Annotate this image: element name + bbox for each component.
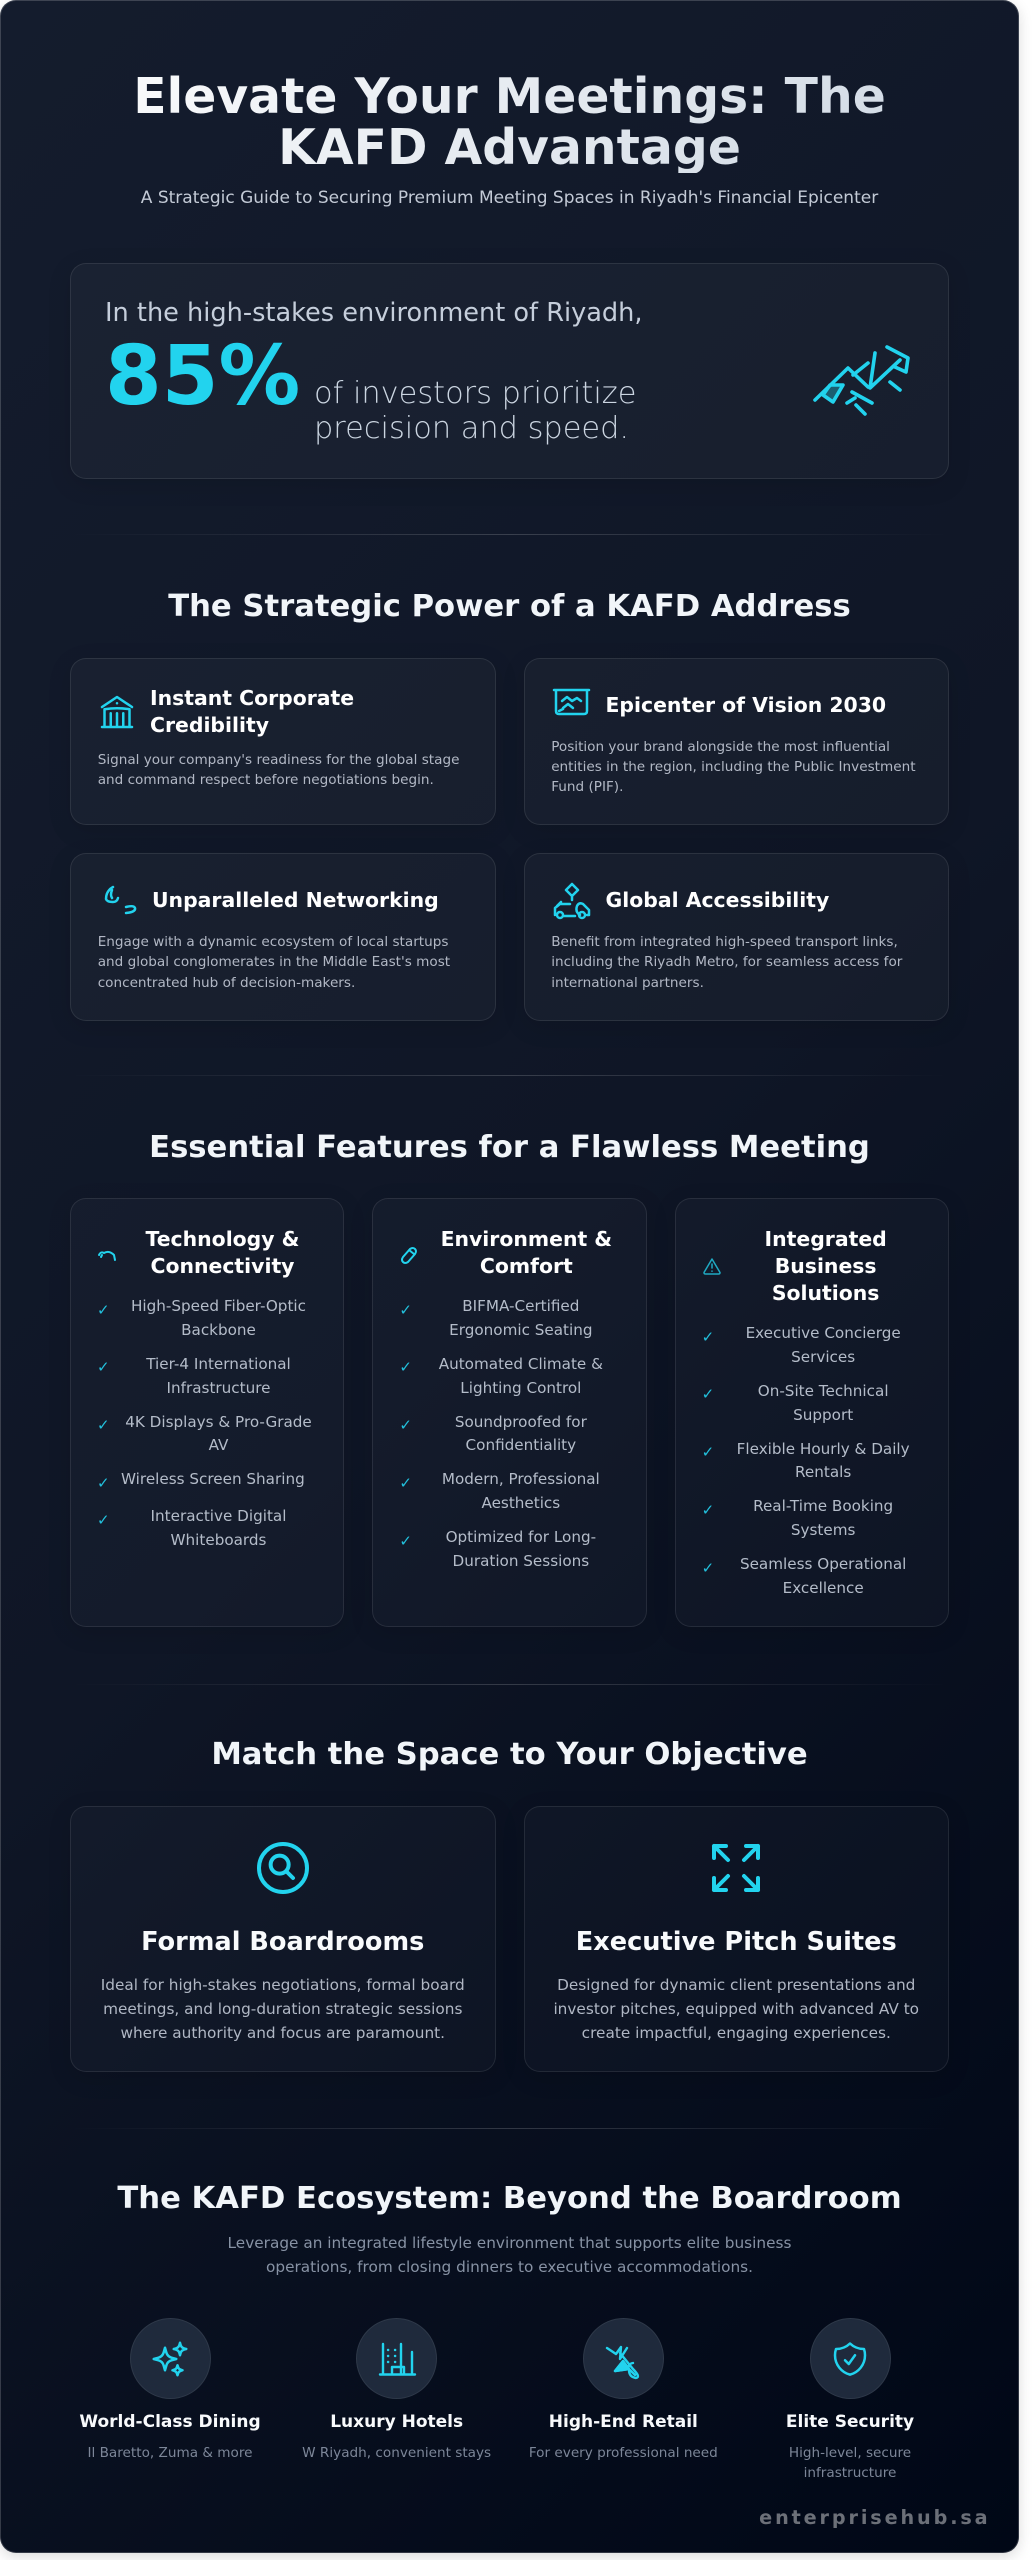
feature item: ✓ [399,1416,412,1434]
card title: Epicenter of Vision 2030 [606,692,886,716]
hero intro text: In the high-stakes environment of Riyadh, [105,298,643,328]
feature item: Optimized for Long- [446,1528,596,1546]
card description: where authority and focus are paramount. [120,2024,445,2042]
card title: Comfort [480,1254,573,1278]
feature item [97,1507,286,1549]
feature item: Whiteboards [171,1531,266,1549]
feature item: Confidentiality [466,1436,576,1454]
card description [101,1976,465,2042]
divider [70,1684,949,1685]
card title [150,686,354,737]
card title: Technology & [146,1227,299,1251]
panel: integrated business solutions [675,1198,949,1627]
card description [98,752,459,788]
icon: networking fragments [104,886,136,914]
icon: bank building [100,696,134,728]
feature item [399,1528,596,1570]
feature item: ✓ [399,1358,412,1376]
panel: epicenter of vision 2030 [524,658,949,825]
heading: match the space: Match the Space to Your Objective [211,1737,808,1772]
card description: entities in the region, including the Public Investment [551,759,916,775]
card description: international partners. [551,975,704,991]
feature list [702,1324,910,1597]
footer brand: enterprisehub.sa [759,2506,990,2529]
panel: technology and connectivity [70,1198,344,1627]
feature item: Systems [791,1521,855,1539]
feature item: BIFMA-Certified [462,1297,579,1315]
card description: concentrated hub of decision-makers. [98,975,355,991]
feature item: ✓ [399,1300,412,1318]
feature item: Soundproofed for [455,1413,587,1431]
card description: meetings, and long-duration strategic sessions [103,2000,462,2018]
card description: Position your brand alongside the most influential [551,738,890,754]
ecosystem introduction: operations, from closing dinners to executive accommodations. [266,2258,753,2276]
item description: For every professional need [529,2445,718,2461]
card title: Connectivity [150,1254,294,1278]
card description [551,738,916,795]
heading: essential features: Essential Features for a Flawless Meeting [149,1130,870,1165]
divider [70,2128,949,2129]
feature item: Aesthetics [481,1494,560,1512]
icon: capsule [401,1247,417,1264]
card description: Ideal for high-stakes negotiations, formal board [101,1976,465,1994]
feature list [399,1297,603,1570]
ecosystem introduction: Leverage an integrated lifestyle environment that supports elite business [228,2234,791,2252]
card title [441,1227,612,1278]
panel: unparalleled networking [70,853,496,1020]
ecosystem introduction [228,2234,791,2276]
title: Elevate Your Meetings: The [133,68,886,124]
feature item [399,1297,592,1339]
card title: Environment & [441,1227,612,1251]
card description: including the Riyadh Metro, for seamless access for [551,954,902,970]
heading: ecosystem: The KAFD Ecosystem: Beyond the Boardroom [117,2181,902,2216]
feature item: Executive Concierge [746,1324,901,1342]
card title: Formal Boardrooms [141,1927,424,1957]
divider [70,534,949,535]
card description [98,934,450,991]
item description: W Riyadh, convenient stays [302,2445,491,2461]
ecosystem item: security [750,2318,950,2488]
85% statistic: 85% [105,329,300,424]
feature item [399,1355,603,1397]
icon: sparkles in circle [130,2318,210,2399]
feature item [702,1555,906,1597]
feature item: Duration Sessions [452,1552,589,1570]
feature item [702,1440,910,1481]
icon: rocket fragments [813,345,910,416]
feature item: Services [791,1348,855,1366]
panel: hero statistic [70,263,949,479]
card title [765,1227,887,1305]
feature item: ✓ [97,1416,110,1434]
feature item: ✓ [97,1358,110,1376]
feature item: Support [793,1406,853,1424]
feature item: ✓ [97,1474,110,1492]
feature item: ✓ [702,1385,714,1403]
title: KAFD Advantage [278,119,741,176]
feature item [97,1297,306,1339]
icon: magnifying glass in circle [257,1842,309,1894]
panel: global accessibility [524,853,949,1020]
feature item: Ergonomic Seating [449,1321,592,1339]
panel: environment and comfort [372,1198,647,1627]
card title: Integrated [765,1227,887,1251]
feature item [702,1497,893,1539]
feature item: Tier-4 International [146,1355,291,1373]
card description [553,1976,919,2042]
card description: and global conglomerates in the Middle East's most [98,954,450,970]
item description: infrastructure [804,2465,896,2481]
card description [551,934,902,991]
icon: scribbled tag in circle [583,2318,664,2399]
ecosystem item: retail [523,2318,723,2488]
feature item [702,1382,889,1424]
item title: World-Class Dining [79,2412,261,2432]
panel: instant corporate credibility [70,658,496,825]
item description [750,2443,950,2484]
feature item: Lighting Control [460,1379,581,1397]
feature item [97,1355,291,1397]
subtitle: A Strategic Guide to Securing Premium Meeting Spaces in Riyadh's Financial Epicenter [141,188,878,208]
feature item: Excellence [783,1579,864,1597]
card title: Business [775,1254,877,1278]
feature item: Modern, Professional [442,1470,600,1488]
item title: High-End Retail [549,2412,698,2432]
card description: create impactful, engaging experiences. [582,2024,891,2042]
item title: Luxury Hotels [330,2412,463,2432]
heading: strategic power: The Strategic Power of a KAFD Address [168,589,851,624]
divider [70,1075,949,1076]
feature item [702,1324,901,1366]
ecosystem item: hotels [297,2318,497,2488]
feature item: Backbone [181,1321,256,1339]
feature item: Interactive Digital [151,1507,286,1525]
card title: Global Accessibility [606,888,829,912]
card description: investor pitches, equipped with advanced AV to [553,2000,919,2018]
statistic description: of investors prioritize [314,376,636,410]
feature item: Flexible Hourly & Daily [737,1440,910,1458]
item description: High-level, secure [789,2445,911,2461]
card title: Solutions [772,1281,879,1305]
icon: warning triangle [703,1258,721,1275]
feature item: Automated Climate & [439,1355,603,1373]
card description: Engage with a dynamic ecosystem of local startups [98,934,448,950]
feature item: ✓ [399,1474,412,1492]
feature item: Real-Time Booking [753,1497,893,1515]
title [0,70,1019,173]
feature item: ✓ [702,1501,714,1519]
icon: connectivity fragment [98,1250,116,1261]
statistic description [314,376,636,446]
icon: presentation chart [552,688,590,716]
card title: Instant Corporate [150,686,354,710]
feature item: High-Speed Fiber-Optic [131,1297,306,1315]
feature item: ✓ [97,1300,110,1318]
feature item [399,1470,600,1512]
feature item: ✓ [97,1511,110,1529]
feature item [97,1413,312,1454]
feature item [399,1413,587,1454]
feature item: ✓ [702,1559,714,1577]
feature item: ✓ [399,1532,412,1550]
card title: Executive Pitch Suites [576,1927,897,1957]
icon: shield check in circle [810,2318,890,2399]
feature list [97,1297,312,1549]
card title: Unparalleled Networking [152,888,439,912]
feature item: Infrastructure [167,1379,270,1397]
icon: arrows pointing out [712,1844,760,1892]
feature item: ✓ [702,1328,714,1346]
card title: Credibility [150,713,269,737]
feature item: ✓ [702,1443,714,1461]
icon: building in circle [356,2318,437,2399]
feature item: On-Site Technical [758,1382,889,1400]
statistic description: precision and speed. [314,410,629,446]
feature item: AV [209,1436,228,1454]
card description: Fund (PIF). [551,779,623,795]
card description: and command respect before negotiations begin. [98,772,434,788]
feature item: Seamless Operational [740,1555,906,1573]
feature item: 4K Displays & Pro-Grade [125,1413,312,1431]
item title: Elite Security [786,2412,914,2432]
feature item: Rentals [795,1463,851,1481]
card description: Signal your company's readiness for the global stage [98,752,459,768]
item description: Il Baretto, Zuma & more [88,2445,252,2461]
panel: formal boardrooms [70,1806,496,2072]
card description: Benefit from integrated high-speed transport links, [551,934,898,950]
feature item: Wireless Screen Sharing [121,1470,305,1488]
card description: Designed for dynamic client presentations and [557,1976,915,1994]
icon: transit network [554,882,590,920]
card title [146,1227,299,1278]
ecosystem item: dining [70,2318,270,2488]
panel: executive pitch suites [524,1806,949,2072]
